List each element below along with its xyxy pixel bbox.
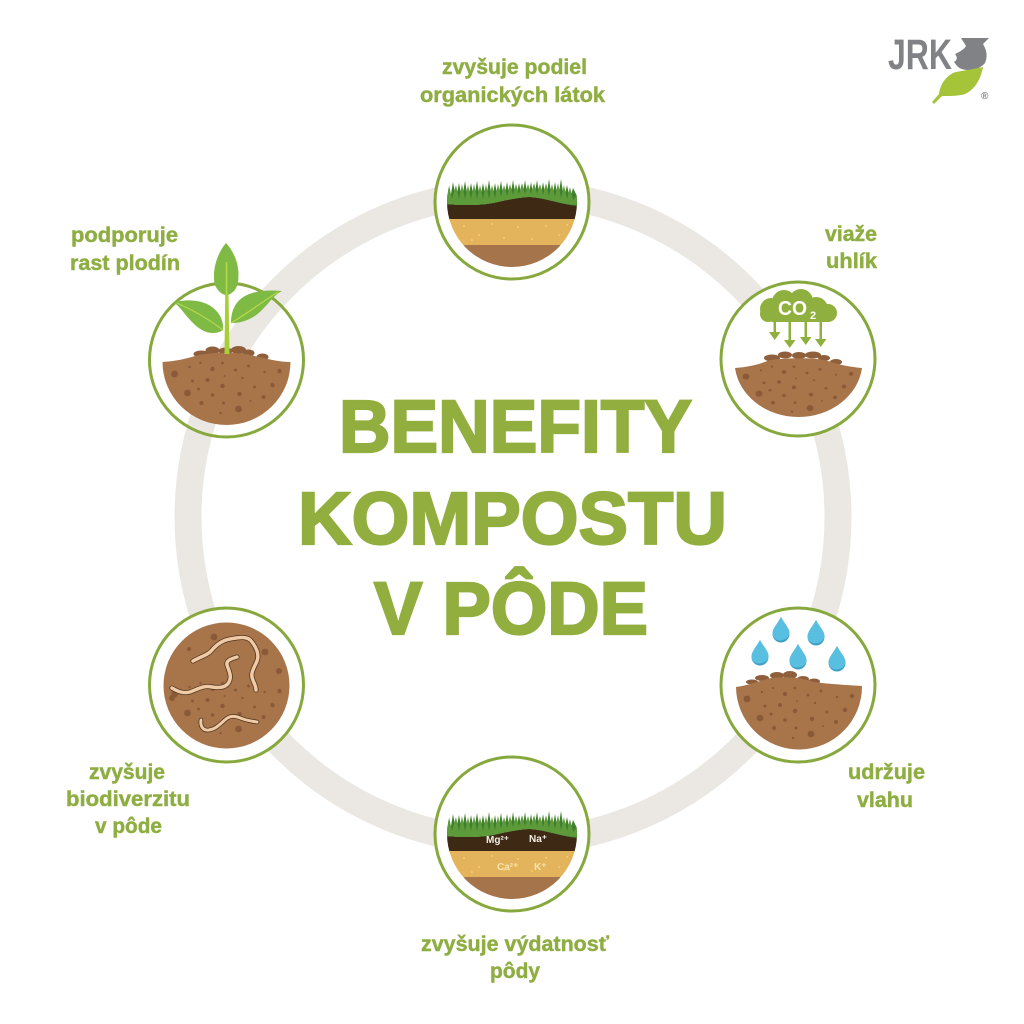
- label: yield: zvyšuje výdatnosť: [421, 933, 610, 956]
- arrows: [769, 322, 826, 348]
- label: moisture: vlahu: [857, 789, 913, 812]
- left leaf: [173, 300, 223, 333]
- background ring: [188, 192, 838, 842]
- icon: water drops over soil: [721, 608, 875, 762]
- label: yield: [421, 933, 610, 983]
- icon: CO2 cloud over soil: [721, 282, 875, 436]
- CO2 text: CO: [778, 298, 807, 320]
- logo wordmark: JRK: [888, 31, 952, 79]
- icon: soil layers with minerals: [435, 757, 589, 911]
- icon: earthworms in soil: [150, 608, 304, 762]
- mineral labels: K⁺: [534, 862, 546, 873]
- title: [298, 385, 727, 650]
- soil disc: [164, 622, 290, 748]
- title: KOMPOSTU: [298, 477, 727, 560]
- label: yield: pôdy: [490, 960, 540, 983]
- right leaf: [231, 290, 282, 323]
- label: moisture: [848, 761, 925, 812]
- label: biodiversity: biodiverzitu: [66, 788, 190, 811]
- mineral labels: Mg²⁺: [486, 835, 509, 846]
- logo bird: [954, 38, 989, 70]
- worms: [172, 637, 258, 730]
- icon: CO2 cloud over soil: 2: [810, 310, 816, 322]
- top leaf: [214, 243, 238, 295]
- label: crop growth: [70, 224, 180, 275]
- label: biodiversity: [66, 761, 190, 838]
- icon: seedling in soil: [150, 243, 304, 437]
- label: carbon: viaže: [825, 223, 877, 246]
- label: crop growth: podporuje: [71, 224, 178, 247]
- label: biodiversity: zvyšuje: [89, 761, 165, 784]
- stem: [224, 263, 230, 354]
- CO2 cloud: [760, 289, 837, 322]
- label: carbon: [825, 223, 877, 273]
- mineral labels: Ca²⁺: [497, 862, 518, 873]
- mineral labels: [486, 834, 547, 873]
- label: moisture: udržuje: [848, 761, 925, 784]
- label: biodiversity: v pôde: [95, 815, 162, 838]
- label: crop growth: rast plodín: [70, 252, 180, 275]
- registered mark: ®: [981, 91, 989, 102]
- label: organic matter: zvyšuje podiel: [442, 56, 587, 79]
- label: organic matter: organických látok: [420, 84, 605, 107]
- label: carbon: uhlík: [826, 250, 877, 273]
- title: V PÔDE: [374, 567, 648, 650]
- logo: [888, 31, 989, 104]
- mineral labels: Na⁺: [529, 834, 547, 845]
- icon: soil layers with grass: [435, 125, 589, 279]
- soil mound: [735, 352, 862, 417]
- soil mound: [736, 671, 862, 749]
- water drops: [752, 617, 846, 672]
- label: organic matter: [420, 56, 605, 107]
- title: BENEFITY: [339, 385, 692, 468]
- logo leaf: [932, 67, 983, 104]
